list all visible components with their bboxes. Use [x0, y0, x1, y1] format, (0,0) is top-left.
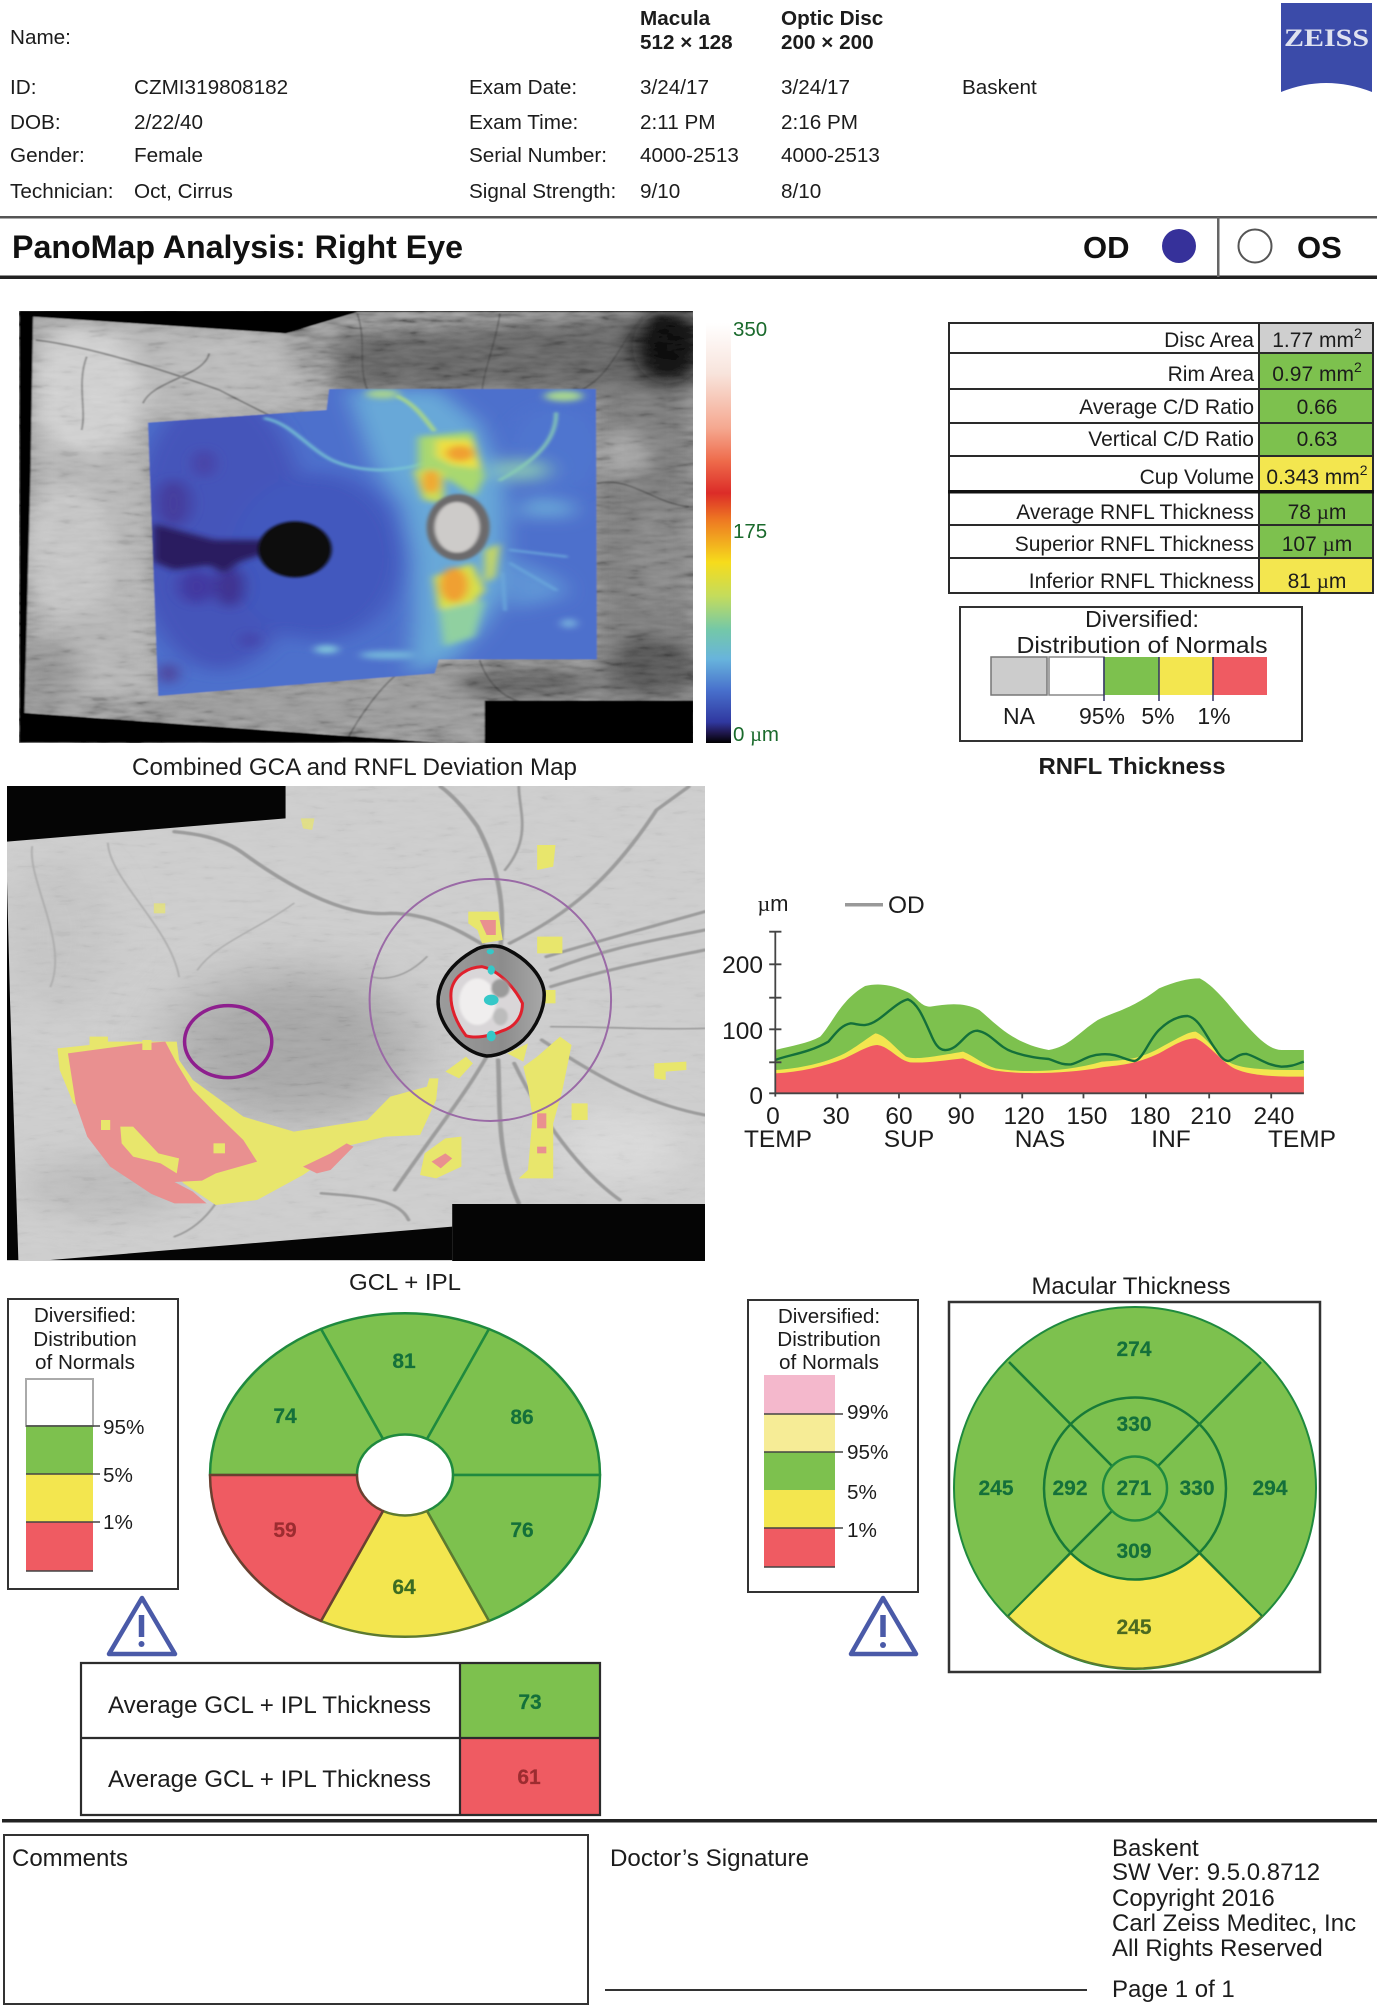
table: average GCL + IPL: 61 [517, 1766, 541, 1789]
green normal band [775, 978, 1304, 1093]
heading: Macular Thickness: Macular Thickness [1032, 1273, 1230, 1300]
sector values: 59 [273, 1519, 297, 1542]
patient header [10, 7, 1037, 203]
patient header: 4000-2513 [640, 144, 739, 167]
row labels [1015, 329, 1254, 593]
patient header: 2/22/40 [134, 111, 203, 134]
legend: macular distribution of normals: Distribution [777, 1328, 881, 1351]
table: average GCL + IPL: Average GCL + IPL Thickness [108, 1766, 431, 1793]
broad fundus brightness [20, 313, 699, 737]
panel: doctor's signature: Doctor’s Signature [610, 1845, 809, 1872]
scale labels: 175 [733, 520, 767, 543]
patient header: Technician: [10, 180, 114, 203]
red band [775, 1038, 1304, 1093]
patient header: DOB: [10, 111, 61, 134]
chart: macular thickness map [949, 1302, 1320, 1672]
RNFL thickness map [19, 311, 693, 743]
legend: GCL distribution of normals: Diversified: [34, 1304, 136, 1327]
x-axis labels: TEMP [744, 1126, 812, 1153]
legend: GCL distribution of normals [8, 1299, 178, 1589]
row labels: Inferior RNFL Thickness [1029, 570, 1254, 593]
x-axis labels: 0 [766, 1103, 780, 1130]
row labels: Cup Volume [1140, 466, 1254, 489]
row labels: Disc Area [1164, 329, 1254, 352]
y-axis labels [722, 891, 789, 1110]
row values: 2 [1354, 325, 1362, 341]
row values: 1.77 mm [1272, 329, 1354, 352]
table: average GCL + IPL [81, 1663, 600, 1815]
pink 1% deviation areas [68, 920, 546, 1203]
title bar [0, 216, 1377, 279]
heading: deviation map: Combined GCA and RNFL Deviation Map [132, 754, 577, 781]
software and copyright text: SW Ver: 9.5.0.8712 [1112, 1859, 1320, 1886]
patient header: ID: [10, 76, 36, 99]
sector values: 274 [1116, 1338, 1152, 1361]
sector values: 245 [978, 1477, 1014, 1500]
row labels: Average C/D Ratio [1079, 396, 1254, 419]
eye selector OS: OS [1297, 230, 1342, 265]
yellow 5% deviation areas [57, 818, 686, 1205]
dark streak left of fovea [153, 523, 265, 573]
table: average GCL + IPL: Average GCL + IPL Thickness [108, 1692, 431, 1719]
sector values: 271 [1116, 1477, 1152, 1500]
x-axis labels: 180 [1130, 1103, 1170, 1130]
retinal vessels [32, 787, 705, 1237]
heading: RNFL parameter table [948, 322, 1374, 594]
icon: ZEISS logo [1281, 3, 1372, 92]
row values: 2 [1354, 359, 1362, 375]
yellow band [775, 1032, 1304, 1093]
legend: GCL distribution of normals: 5% [103, 1464, 133, 1487]
legend: macular distribution of normals [748, 1300, 918, 1592]
software and copyright text: Page 1 of 1 [1112, 1976, 1235, 2003]
legend labels [1003, 703, 1231, 729]
patient header: Oct, Cirrus [134, 180, 233, 203]
foveal dark spot [258, 521, 332, 577]
sector values: 76 [510, 1519, 534, 1542]
scale labels: 350 [733, 318, 767, 341]
row values: 81 µm [1288, 569, 1346, 593]
x-axis labels: INF [1151, 1126, 1191, 1153]
legend: GCL distribution of normals: 95% [103, 1416, 144, 1439]
y-axis labels: 200 [722, 952, 763, 979]
sector values: 64 [392, 1576, 416, 1599]
optic disc [427, 494, 490, 561]
patient header: Baskent [962, 76, 1037, 99]
software and copyright text: All Rights Reserved [1112, 1935, 1323, 1962]
sector values [978, 1338, 1288, 1639]
x-axis labels: 60 [885, 1103, 913, 1130]
sector values [273, 1350, 534, 1599]
software and copyright text [1112, 1835, 1356, 2003]
black image margins [7, 785, 286, 842]
legend labels: 5% [1141, 703, 1175, 729]
cup highlights [459, 978, 510, 1025]
legend colour bar [764, 1375, 843, 1567]
patient header: Gender: [10, 144, 85, 167]
footer divider [2, 1819, 1377, 1822]
row values: 78 µm [1288, 500, 1346, 524]
x-axis labels: 30 [822, 1103, 850, 1130]
patient header: Signal Strength: [469, 180, 616, 203]
row values: 107 µm [1282, 532, 1352, 556]
fovea marker [185, 1006, 272, 1078]
x-axis labels [744, 1103, 1336, 1153]
legend colour bar [26, 1379, 100, 1571]
y-axis labels: 100 [722, 1018, 763, 1045]
yellow islands inside pink [101, 1040, 225, 1173]
x-axis labels: 210 [1191, 1103, 1231, 1130]
cup outline [451, 967, 522, 1037]
patient header: 4000-2513 [781, 144, 880, 167]
x-axis labels: 90 [947, 1103, 975, 1130]
patient header: CZMI319808182 [134, 76, 288, 99]
legend: OD line [845, 892, 925, 919]
software and copyright text: Baskent [1112, 1835, 1199, 1862]
sector values: 330 [1179, 1477, 1215, 1500]
chart: RNFL TSNIT profile [722, 891, 1336, 1153]
colour scale bar [706, 318, 779, 746]
legend: macular distribution of normals: 99% [847, 1401, 888, 1424]
patient header: 200 × 200 [781, 31, 874, 54]
legend: macular distribution of normals: 95% [847, 1441, 888, 1464]
heading: analysis title: PanoMap Analysis: Right Eye [12, 229, 463, 265]
patient header: Female [134, 144, 203, 167]
row labels: Average RNFL Thickness [1016, 501, 1254, 524]
legend swatches [991, 657, 1267, 701]
scale labels [733, 318, 779, 746]
patient header: Optic Disc [781, 7, 883, 30]
legend labels: 95% [1079, 703, 1125, 729]
row values: 0.97 mm [1272, 363, 1354, 386]
icon: filled OD dot [1162, 229, 1196, 263]
sector values: 81 [392, 1350, 416, 1373]
legend: macular distribution of normals: Diversified: [778, 1305, 880, 1328]
patient header: 8/10 [781, 180, 821, 203]
sector values: 292 [1052, 1477, 1088, 1500]
x-axis labels: 120 [1004, 1103, 1044, 1130]
icon: warning triangle [109, 1598, 175, 1654]
black image margins [19, 311, 693, 713]
row values: 0.343 mm [1266, 466, 1360, 489]
legend: GCL distribution of normals: of Normals [35, 1351, 135, 1374]
veins [36, 313, 689, 740]
icon: ZEISS logo: ZEISS [1284, 25, 1369, 52]
patient header: Exam Time: [469, 111, 578, 134]
row labels: Vertical C/D Ratio [1088, 428, 1254, 451]
eye selector OD: OD [1083, 230, 1130, 265]
patient header: Macula [640, 7, 711, 30]
patient header: Exam Date: [469, 76, 577, 99]
legend labels: 1% [1197, 703, 1231, 729]
row values: 0.63 [1297, 428, 1337, 451]
legend: GCL distribution of normals: Distribution [33, 1328, 137, 1351]
sector values: 74 [273, 1405, 297, 1428]
patient header: 512 × 128 [640, 31, 733, 54]
sector values: 86 [510, 1406, 534, 1429]
legend: GCL distribution of normals: 1% [103, 1511, 133, 1534]
row labels: Superior RNFL Thickness [1015, 533, 1254, 556]
sector values: 330 [1116, 1413, 1152, 1436]
legend: macular distribution of normals: of Normals [779, 1351, 879, 1374]
panel: comments [4, 1835, 588, 2004]
icon: warning triangle [851, 1598, 916, 1654]
row values: 2 [1360, 462, 1368, 478]
patient header: Serial Number: [469, 144, 607, 167]
chart axes [769, 932, 1304, 1098]
row values: 0.66 [1297, 396, 1337, 419]
legend: RNFL distribution of normals [960, 606, 1302, 741]
heading: RNFL Thickness: RNFL Thickness [1038, 753, 1226, 779]
x-axis labels: 240 [1254, 1103, 1294, 1130]
software and copyright text: Carl Zeiss Meditec, Inc [1112, 1910, 1356, 1937]
sector values: 245 [1116, 1616, 1152, 1639]
legend: macular distribution of normals: 5% [847, 1481, 877, 1504]
legend: OD line: OD [888, 892, 925, 919]
patient header: 3/24/17 [640, 76, 709, 99]
scale labels: 0 µm [733, 723, 779, 746]
patient header: 9/10 [640, 180, 680, 203]
heading: GCL + IPL: GCL + IPL [349, 1269, 461, 1295]
cyan markers [484, 949, 499, 1041]
x-axis labels: 150 [1067, 1103, 1107, 1130]
icon: empty OS dot [1238, 230, 1272, 262]
patient header: 2:16 PM [781, 111, 858, 134]
y-axis labels: µm [757, 891, 789, 916]
RNFL measurement circle [370, 879, 611, 1121]
measured OD line [775, 999, 1304, 1067]
x-axis labels: SUP [884, 1126, 934, 1153]
x-axis labels: TEMP [1268, 1126, 1336, 1153]
y-axis labels: 0 [749, 1083, 763, 1110]
chart: GCL + IPL sector map [210, 1313, 600, 1637]
patient header: Name: [10, 26, 71, 49]
purple mottling [156, 450, 257, 683]
patient header: 3/24/17 [781, 76, 850, 99]
table: average GCL + IPL: 73 [518, 1691, 542, 1714]
software and copyright text: Copyright 2016 [1112, 1885, 1275, 1912]
sector values: 309 [1116, 1540, 1152, 1563]
row labels: Rim Area [1168, 363, 1254, 386]
thickness colour overlay [133, 387, 602, 700]
legend labels: NA [1003, 703, 1036, 729]
legend: macular distribution of normals: 1% [847, 1519, 877, 1542]
x-axis labels: NAS [1015, 1126, 1065, 1153]
optic disc outline [438, 946, 544, 1056]
legend: RNFL distribution of normals: Diversified: [1085, 606, 1199, 632]
combined deviation map [0, 770, 735, 1271]
row values [1266, 325, 1368, 593]
legend: RNFL distribution of normals: Distribution of Normals [1016, 632, 1268, 658]
sector values: 294 [1252, 1477, 1288, 1500]
panel: comments: Comments [12, 1845, 128, 1872]
patient header: 2:11 PM [640, 111, 716, 134]
